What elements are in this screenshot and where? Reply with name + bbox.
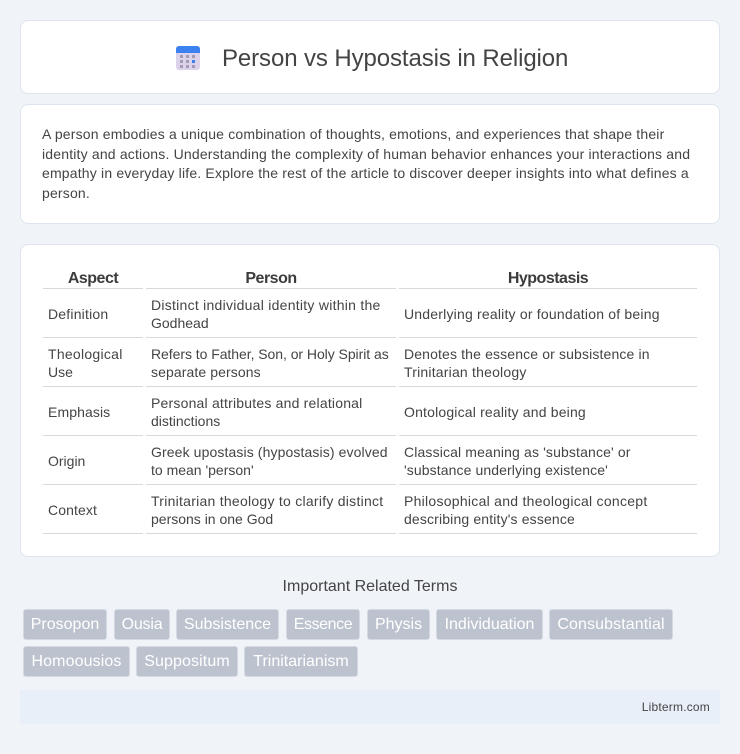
related terms tags: Trinitarianism (253, 653, 349, 670)
related terms tags: Homoousios (32, 653, 121, 670)
comparison table: Refers to Father, Son, or Holy Spirit as (151, 346, 389, 362)
related terms tags: Consubstantial (557, 616, 665, 633)
related terms tags: Individuation (445, 616, 534, 633)
row: origin: Origin (48, 453, 85, 469)
related terms tags: Ousia (122, 616, 162, 633)
related terms tags (23, 609, 673, 677)
comparison table: Trinitarian theology (404, 364, 527, 380)
comparison table: Ontological reality and being (404, 404, 586, 420)
comparison table: to mean 'person' (151, 462, 254, 478)
footer bar (20, 690, 720, 724)
header: hypostasis: Hypostasis (508, 270, 588, 287)
comparison table: Philosophical and theological concept (404, 493, 648, 509)
row: theological use: Use (48, 364, 73, 380)
related terms tags: Subsistence (184, 616, 271, 633)
related terms tags: Essence (294, 616, 352, 633)
comparison table: Underlying reality or foundation of being (404, 306, 660, 322)
header panel (20, 20, 720, 94)
header: aspect: Aspect (68, 270, 118, 287)
comparison table: distinctions (151, 413, 220, 429)
table panel (20, 244, 720, 557)
related terms tags: Physis (375, 616, 422, 633)
comparison table: describing entity's essence (404, 511, 575, 527)
comparison table (43, 270, 697, 534)
related terms tags: Suppositum (144, 653, 230, 670)
comparison table: Classical meaning as 'substance' or (404, 444, 631, 460)
related terms heading: Important Related Terms (283, 578, 457, 595)
intro text: A person embodies a unique combination of thoughts, emotions, and experiences that shape their (42, 126, 664, 142)
header: person: Person (245, 270, 297, 287)
intro text (42, 126, 690, 201)
icon: calendar (176, 46, 200, 70)
comparison table: Godhead (151, 315, 209, 331)
related terms tags: Prosopon (31, 616, 99, 633)
title: Person vs Hypostasis in Religion (222, 45, 568, 72)
intro text: identity and actions. Understanding the complexity of human behavior enhances your interactions and (42, 146, 690, 162)
row: theological use: Theological (48, 346, 123, 362)
comparison table: Personal attributes and relational (151, 395, 362, 411)
intro panel (20, 104, 720, 224)
row: context: Context (48, 502, 97, 518)
intro text: person. (42, 185, 90, 201)
comparison table: Denotes the essence or subsistence in (404, 346, 650, 362)
row: theological use (48, 346, 123, 380)
comparison table: Distinct individual identity within the (151, 297, 381, 313)
comparison table: separate persons (151, 364, 261, 380)
comparison table: Trinitarian theology to clarify distinct (151, 493, 383, 509)
row: emphasis: Emphasis (48, 404, 110, 420)
comparison table: 'substance underlying existence' (404, 462, 608, 478)
comparison table: persons in one God (151, 511, 273, 527)
intro text: empathy in everyday life. Explore the rest of the article to discover deeper insights into what defines a (42, 165, 689, 181)
comparison table: Greek upostasis (hypostasis) evolved (151, 444, 388, 460)
row: definition: Definition (48, 306, 108, 322)
footer source text: Libterm.com (642, 700, 710, 714)
